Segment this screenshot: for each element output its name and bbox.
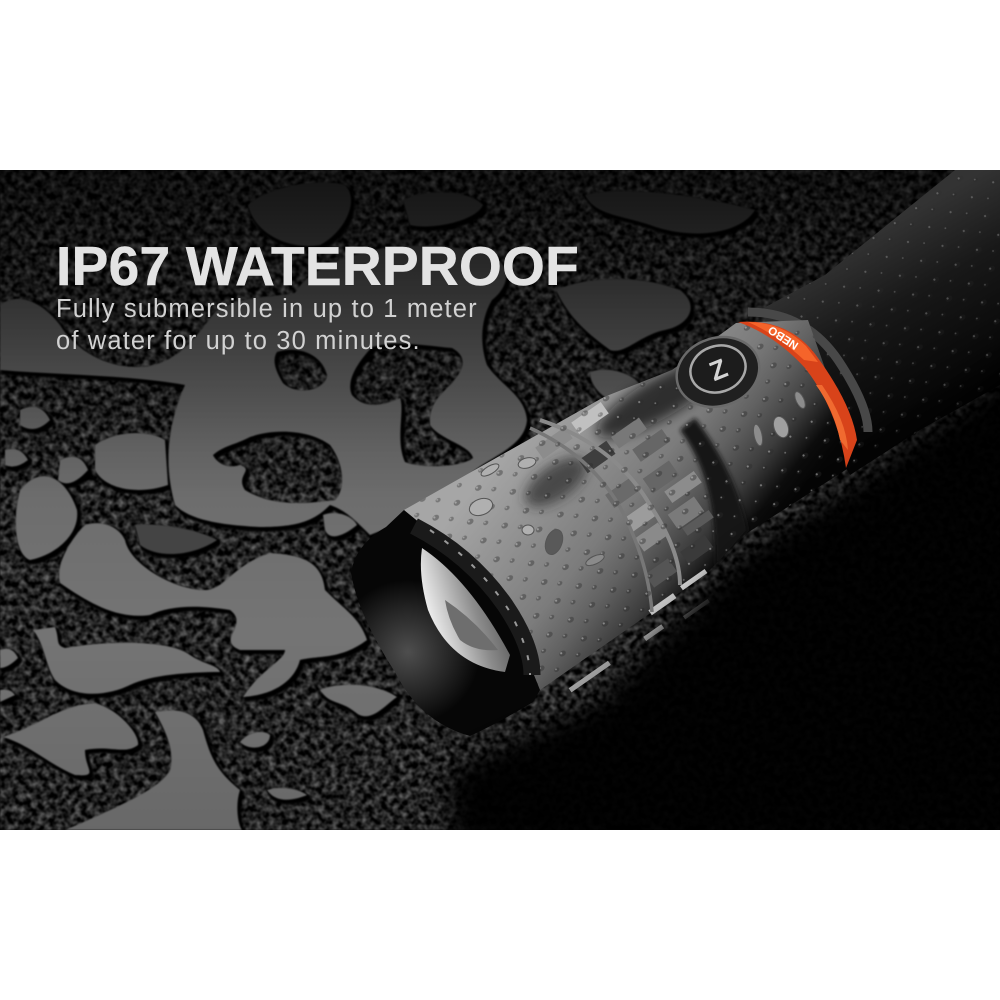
water puddles — [0, 182, 755, 830]
title: IP67 WATERPROOF — [56, 235, 579, 297]
power button — [676, 336, 759, 408]
grip blocks — [535, 402, 714, 692]
shading: darker top of the surface — [0, 170, 954, 452]
description text: of water for up to 30 minutes. — [56, 327, 421, 355]
shadow beneath flashlight — [450, 350, 1000, 850]
flashlight metal band — [748, 312, 868, 432]
description text — [56, 295, 478, 355]
flashlight main body — [404, 320, 858, 690]
flashlight — [351, 170, 1000, 736]
orange ring — [738, 322, 857, 468]
dim reflections on body — [518, 366, 698, 514]
NEBO label: NEBO — [766, 323, 801, 351]
description text: Fully submersible in up to 1 meter — [56, 295, 478, 323]
power button: Z — [705, 353, 732, 387]
photo: wet surface with flashlight — [0, 170, 1000, 830]
lens — [421, 548, 510, 672]
droplets on flashlight — [404, 320, 858, 690]
flashlight head cup — [351, 510, 540, 736]
grip dark band — [680, 418, 748, 568]
large droplets — [467, 390, 807, 568]
grip ring lines — [530, 420, 680, 612]
bezel around lens — [414, 526, 532, 675]
textured droplets — [0, 170, 1000, 830]
flashlight rear barrel — [760, 170, 1000, 475]
